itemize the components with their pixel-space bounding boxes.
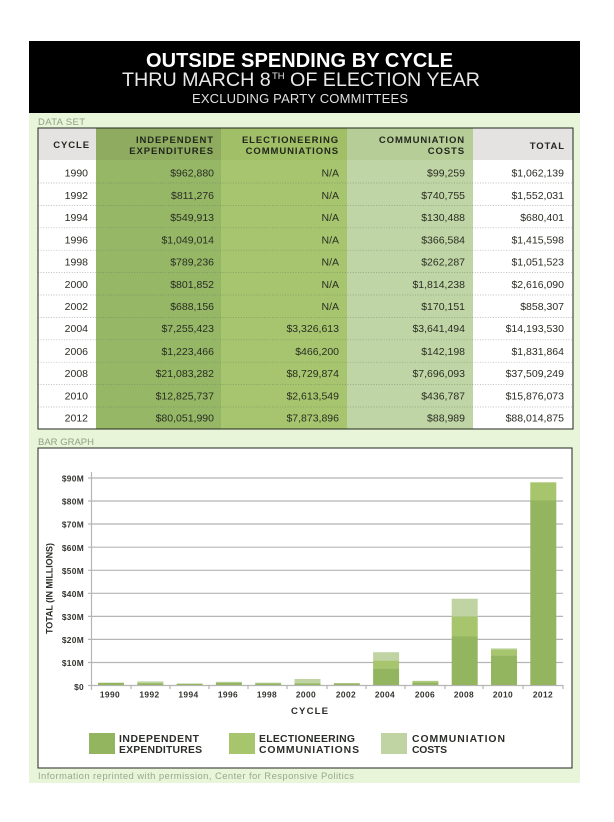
table rows: $12,825,737 xyxy=(156,390,214,402)
table rows: $801,852 xyxy=(170,279,214,291)
subtitle: THRU MARCH 8 xyxy=(122,69,271,91)
table rows: $680,401 xyxy=(520,212,564,224)
table rows: $8,729,874 xyxy=(286,368,339,380)
table rows: $740,755 xyxy=(421,190,465,202)
x axis labels: 2002 xyxy=(336,690,356,700)
table rows: 2008 xyxy=(65,368,88,380)
table rows: $549,913 xyxy=(170,212,214,224)
table rows: $130,488 xyxy=(421,212,465,224)
y axis labels: $0 xyxy=(74,682,84,692)
legend: communication costs xyxy=(381,733,505,756)
table rows: 1990 xyxy=(65,168,88,180)
legend: independent expenditures: INDEPENDENT xyxy=(119,734,200,745)
table rows: $1,223,466 xyxy=(161,346,214,358)
x axis labels: 2004 xyxy=(375,690,395,700)
table rows: 1998 xyxy=(65,256,88,268)
table rows: $366,584 xyxy=(421,234,465,246)
table rows: $811,276 xyxy=(171,190,214,202)
bar graph panel xyxy=(38,448,572,768)
table header row: INDEPENDENT xyxy=(136,135,214,146)
table rows: $80,051,990 xyxy=(156,412,214,424)
table rows: 1992 xyxy=(65,190,88,202)
table rows: $466,200 xyxy=(295,346,339,358)
table header row: ELECTIONEERING xyxy=(242,135,339,146)
table rows: $88,989 xyxy=(427,412,465,424)
x axis labels: 1994 xyxy=(178,690,199,700)
x axis labels: 2010 xyxy=(493,690,513,700)
title banner xyxy=(29,41,580,113)
legend: independent expenditures: EXPENDITURES xyxy=(119,745,202,756)
table rows: $1,831,864 xyxy=(511,346,564,358)
y axis labels: $20M xyxy=(62,635,84,645)
table header row: EXPENDITURES xyxy=(129,146,214,157)
table rows: $142,198 xyxy=(421,346,465,358)
y axis labels: $40M xyxy=(62,589,84,599)
table rows: 2006 xyxy=(65,346,88,358)
subtitle: TH xyxy=(272,71,285,82)
y axis labels: $10M xyxy=(62,658,84,668)
table rows: $1,814,238 xyxy=(412,279,465,291)
legend: communication costs: COMMUNIATION xyxy=(412,734,505,745)
x axis labels: 1998 xyxy=(257,690,277,700)
bar graph label: BAR GRAPH xyxy=(38,437,94,448)
sub-subtitle: EXCLUDING PARTY COMMITTEES xyxy=(192,91,408,106)
table rows: $7,696,093 xyxy=(412,368,465,380)
stacked bars xyxy=(98,482,556,685)
table rows: 1996 xyxy=(65,234,88,246)
table rows: $37,509,249 xyxy=(506,368,564,380)
legend: electioneering communications xyxy=(229,733,359,756)
table rows: N/A xyxy=(321,168,339,180)
table header row: COMMUNIATION xyxy=(379,135,465,146)
y axis labels xyxy=(62,474,84,692)
x axis labels: 2006 xyxy=(415,690,435,700)
table rows: $1,062,139 xyxy=(511,168,564,180)
y axis labels: $60M xyxy=(62,543,84,553)
table header row: COSTS xyxy=(428,146,465,157)
table rows: $7,255,423 xyxy=(161,323,214,335)
table rows: $1,415,598 xyxy=(511,234,564,246)
table rows: $3,641,494 xyxy=(412,323,465,335)
table rows: $1,049,014 xyxy=(161,234,214,246)
table rows: $88,014,875 xyxy=(506,412,564,424)
table rows: $2,613,549 xyxy=(286,390,339,402)
subtitle: OF ELECTION YEAR xyxy=(290,69,480,91)
table rows: $2,616,090 xyxy=(511,279,564,291)
y axis labels: $50M xyxy=(62,566,84,576)
table rows: 1994 xyxy=(65,212,88,224)
legend: independent expenditures xyxy=(89,733,202,756)
table rows: 2000 xyxy=(65,279,88,291)
source footer: Information reprinted with permission, Center for Responsive Politics xyxy=(38,771,354,782)
table rows: $436,787 xyxy=(421,390,465,402)
table rows: $962,880 xyxy=(170,168,214,180)
table header row xyxy=(38,128,573,160)
table rows: $858,307 xyxy=(520,301,564,313)
y axis labels: $80M xyxy=(62,496,84,506)
legend: electioneering communications: COMMUNIATIONS xyxy=(259,745,359,756)
legend: electioneering communications: ELECTIONEERING xyxy=(259,734,355,745)
table rows: N/A xyxy=(321,301,339,313)
table header row: CYCLE xyxy=(53,140,90,151)
x axis labels: 2000 xyxy=(296,690,316,700)
table rows: N/A xyxy=(321,212,339,224)
x axis labels: 2008 xyxy=(454,690,474,700)
table rows: 2010 xyxy=(65,390,88,402)
column backgrounds xyxy=(96,128,473,429)
table rows: $14,193,530 xyxy=(506,323,564,335)
x axis title: CYCLE xyxy=(291,706,329,717)
table rows: $170,151 xyxy=(421,301,465,313)
table rows: N/A xyxy=(321,279,339,291)
legend xyxy=(89,733,505,756)
title: OUTSIDE SPENDING BY CYCLE xyxy=(146,50,453,72)
y axis labels: $90M xyxy=(62,474,84,484)
table rows: $688,156 xyxy=(170,301,214,313)
table rows: N/A xyxy=(321,234,339,246)
table rows: N/A xyxy=(321,190,339,202)
y axis labels: $70M xyxy=(62,520,84,530)
table rows: N/A xyxy=(321,256,339,268)
x axis labels: 2012 xyxy=(533,690,553,700)
x axis labels: 1990 xyxy=(100,690,120,700)
table rows: 2002 xyxy=(65,301,88,313)
table rows: 2004 xyxy=(65,323,88,335)
table rows: $7,873,896 xyxy=(286,412,339,424)
table header row: COMMUNIATIONS xyxy=(246,146,339,157)
data table xyxy=(38,128,573,429)
x axis labels: 1996 xyxy=(218,690,238,700)
table rows: 2012 xyxy=(65,412,88,424)
table rows: $3,326,613 xyxy=(286,323,339,335)
table rows: $789,236 xyxy=(170,256,214,268)
table header row: TOTAL xyxy=(530,141,565,152)
x axis labels xyxy=(100,690,553,700)
table rows: $99,259 xyxy=(427,168,465,180)
data set label: DATA SET xyxy=(38,117,85,128)
table rows: $21,083,282 xyxy=(156,368,214,380)
table rows: $15,876,073 xyxy=(506,390,564,402)
table rows: $262,287 xyxy=(421,256,465,268)
pale green background panel xyxy=(29,113,580,783)
y axis title: TOTAL (IN MILLIONS) xyxy=(44,543,54,634)
y axis labels: $30M xyxy=(62,612,84,622)
legend: communication costs: COSTS xyxy=(412,745,447,756)
x axis labels: 1992 xyxy=(139,690,160,700)
table rows: $1,051,523 xyxy=(511,256,564,268)
table rows xyxy=(65,168,564,424)
table rows: $1,552,031 xyxy=(511,190,564,202)
